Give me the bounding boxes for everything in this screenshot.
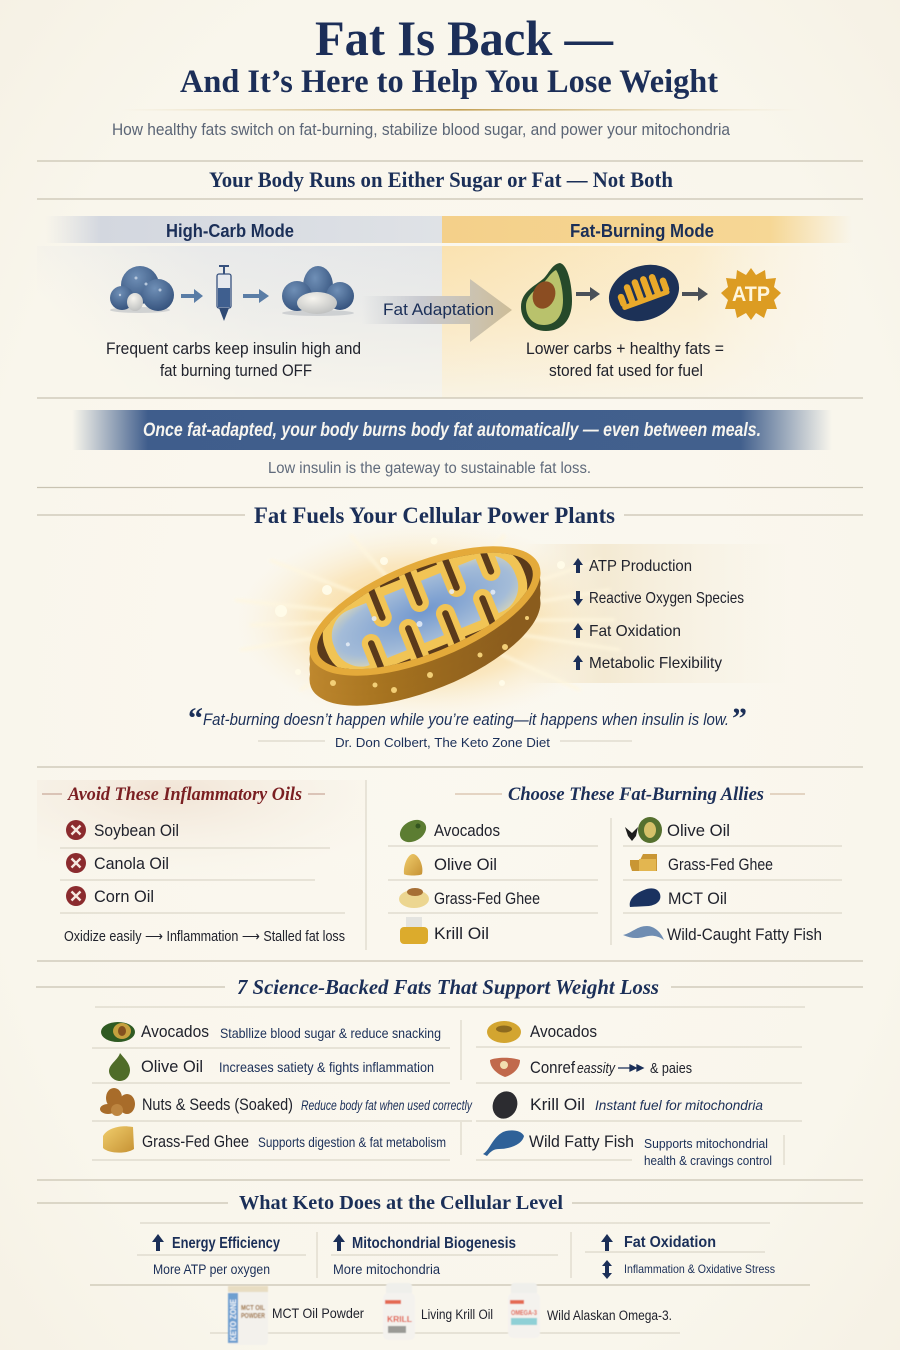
row: wild fatty fish: health & cravings control	[644, 1153, 772, 1168]
row: avocados: Stabllize blood sugar & reduce snacking	[220, 1025, 441, 1041]
row: wild fatty fish: Supports mitochondrial	[644, 1136, 768, 1151]
row: conref: eassity	[577, 1061, 616, 1077]
item: olive oil	[404, 854, 497, 876]
panel: fat-burning allies	[388, 784, 842, 944]
row: grass-fed ghee: Grass-Fed Ghee	[142, 1132, 249, 1151]
benefit: fat oxidation: Fat Oxidation	[624, 1234, 716, 1251]
product: mct oil powder: POWDER	[241, 1313, 265, 1320]
row: avocados	[101, 1022, 441, 1042]
item: fat oxidation: Fat Oxidation	[589, 623, 681, 640]
item: olive oil right	[625, 817, 730, 843]
row: nuts and seeds: Reduce body fat when used correctly	[301, 1098, 473, 1113]
icon: syringe	[217, 266, 231, 321]
heading: 7 science-backed fats: 7 Science-Backed Fats That Support Weight Loss	[237, 975, 659, 999]
row: krill oil: Instant fuel for mitochondria	[595, 1097, 763, 1113]
text: high-carb caption: Frequent carbs keep insulin high and	[106, 340, 361, 358]
row: olive oil: Increases satiety & fights inflammation	[219, 1059, 434, 1075]
note: low insulin: Low insulin is the gateway to sustainable fat loss.	[268, 460, 591, 477]
icon: dark mitochondrion	[601, 255, 687, 331]
product: living krill oil: KRILL	[387, 1314, 412, 1324]
panel: stats background	[525, 544, 790, 683]
icon: avocado	[521, 263, 572, 331]
item: mct oil	[630, 888, 727, 908]
heading: allies: Choose These Fat-Burning Allies	[508, 784, 764, 805]
item: corn oil: Corn Oil	[94, 887, 154, 906]
text: high-carb caption	[106, 340, 361, 380]
row: olive oil: Olive Oil	[141, 1057, 203, 1076]
row: olive oil	[109, 1053, 434, 1081]
item: ghee right: Grass-Fed Ghee	[668, 855, 773, 874]
item: avocados: Avocados	[434, 821, 500, 840]
item: canola oil: Canola Oil	[94, 854, 169, 873]
row: krill oil	[488, 1087, 763, 1123]
heading: keto cellular level: What Keto Does at the Cellular Level	[239, 1192, 563, 1214]
quote: ”	[732, 702, 747, 735]
row: avocados right: Avocados	[530, 1022, 597, 1041]
product: mct oil powder: MCT Oil Powder	[272, 1305, 364, 1321]
product: wild alaskan omega-3: Wild Alaskan Omega-3.	[547, 1308, 672, 1323]
item: grass-fed ghee: Grass-Fed Ghee	[434, 889, 540, 908]
callout banner: Once fat-adapted, your body burns body fat automatically — even between meals.	[143, 420, 761, 441]
icon: ATP burst: ATP	[732, 283, 770, 306]
heading: cellular power plants: Fat Fuels Your Cellular Power Plants	[254, 503, 615, 528]
item: canola oil	[66, 853, 169, 873]
row: grass-fed ghee: Supports digestion & fat metabolism	[258, 1134, 446, 1150]
product: mct oil powder: KETO ZONE	[229, 1298, 238, 1341]
benefit: mitochondrial biogenesis: Mitochondrial Biogenesis	[352, 1235, 516, 1252]
row: avocados right	[487, 1021, 597, 1043]
panel: high-carb mode	[37, 216, 442, 398]
text: high-carb caption: fat burning turned OFF	[160, 362, 312, 380]
product: living krill oil: Living Krill Oil	[421, 1307, 493, 1322]
title: And It’s Here to Help You Lose Weight	[180, 64, 718, 100]
benefit: fat oxidation: Inflammation & Oxidative Stress	[624, 1262, 775, 1276]
item: soybean oil	[66, 820, 179, 840]
row: wild fatty fish	[483, 1130, 772, 1168]
item: olive oil right: Olive Oil	[667, 821, 730, 840]
item: olive oil: Olive Oil	[434, 855, 497, 874]
products row	[228, 1283, 672, 1345]
item: krill oil: Krill Oil	[434, 924, 489, 943]
arrow: fat adaptation: Fat Adaptation	[383, 301, 494, 319]
product: mct oil powder: MCT OIL	[241, 1305, 266, 1312]
product: wild alaskan omega-3: OMEGA-3	[511, 1308, 537, 1317]
icon: ATP burst	[721, 268, 781, 320]
subtitle: How healthy fats switch on fat-burning, stabilize blood sugar, and power your mitochondria	[112, 120, 730, 139]
text: fat-burning caption: stored fat used for fuel	[549, 362, 703, 380]
benefit: energy efficiency: More ATP per oxygen	[153, 1262, 270, 1277]
item: ghee right	[630, 854, 773, 874]
quote: Fat-burning doesn’t happen while you’re eating—it happens when insulin is low.	[203, 710, 729, 729]
icon: glucose with insulin	[282, 266, 354, 316]
text: fat-burning caption	[526, 340, 724, 380]
text: fat-burning caption: Lower carbs + healthy fats =	[526, 340, 724, 358]
icon: glucose blobs	[110, 266, 174, 313]
benefit: mitochondrial biogenesis	[333, 1234, 516, 1277]
row: nuts and seeds: Nuts & Seeds (Soaked)	[142, 1095, 293, 1114]
benefit: energy efficiency: Energy Efficiency	[172, 1235, 280, 1252]
product: wild alaskan omega-3	[508, 1283, 672, 1338]
title	[180, 10, 718, 100]
heading: sugar or fat: Your Body Runs on Either Sugar or Fat — Not Both	[209, 167, 673, 192]
item: soybean oil: Soybean Oil	[94, 821, 179, 840]
heading: avoid oils: Avoid These Inflammatory Oils	[67, 784, 302, 805]
item: fatty fish: Wild-Caught Fatty Fish	[667, 925, 822, 944]
heading: fat-burning mode: Fat-Burning Mode	[570, 221, 714, 241]
row: grass-fed ghee	[103, 1126, 446, 1153]
item: avocados	[396, 815, 500, 847]
product: living krill oil	[383, 1283, 493, 1340]
arrow	[576, 287, 600, 301]
item: grass-fed ghee	[399, 888, 540, 908]
panel: seven fats list	[92, 1020, 802, 1168]
item: mct oil: MCT Oil	[668, 889, 727, 908]
heading: high-carb mode: High-Carb Mode	[166, 221, 294, 241]
callout banner	[72, 410, 832, 450]
panel: keto benefits	[137, 1232, 775, 1279]
title: Fat Is Back —	[315, 10, 614, 66]
benefit: mitochondrial biogenesis: More mitochondria	[333, 1262, 440, 1277]
benefit: energy efficiency	[152, 1234, 280, 1277]
item: ATP production: ATP Production	[589, 558, 692, 575]
attribution: Dr. Don Colbert, The Keto Zone Diet	[335, 735, 550, 750]
item: krill oil	[400, 917, 489, 944]
row: conref: Conref	[530, 1059, 575, 1077]
arrow: fat adaptation	[362, 279, 512, 342]
arrow	[243, 289, 269, 303]
quote	[188, 702, 747, 735]
benefit: fat oxidation	[601, 1234, 775, 1279]
row: conref: & paies	[650, 1060, 692, 1077]
list: mitochondrial effects	[573, 558, 744, 672]
note: oxidize chain: Oxidize easily ⟶ Inflammation ⟶ Stalled fat loss	[64, 929, 345, 945]
row: krill oil: Krill Oil	[530, 1095, 585, 1114]
panel: avoid oils	[37, 780, 366, 945]
item: corn oil	[66, 886, 154, 906]
row: avocados: Avocados	[141, 1022, 209, 1041]
arrow	[181, 289, 203, 303]
panel: fat-burning mode	[442, 216, 863, 398]
row: conref	[490, 1058, 692, 1077]
illustration: mitochondrion	[238, 535, 578, 710]
arrow	[682, 287, 708, 301]
organelle side wall	[293, 529, 557, 733]
quote: “	[188, 702, 203, 735]
item: reactive oxygen species: Reactive Oxygen Species	[589, 590, 744, 607]
product: mct oil powder	[228, 1286, 364, 1345]
row: nuts and seeds	[100, 1088, 473, 1116]
row: wild fatty fish: Wild Fatty Fish	[529, 1132, 634, 1151]
item: metabolic flexibility: Metabolic Flexibility	[589, 655, 722, 672]
